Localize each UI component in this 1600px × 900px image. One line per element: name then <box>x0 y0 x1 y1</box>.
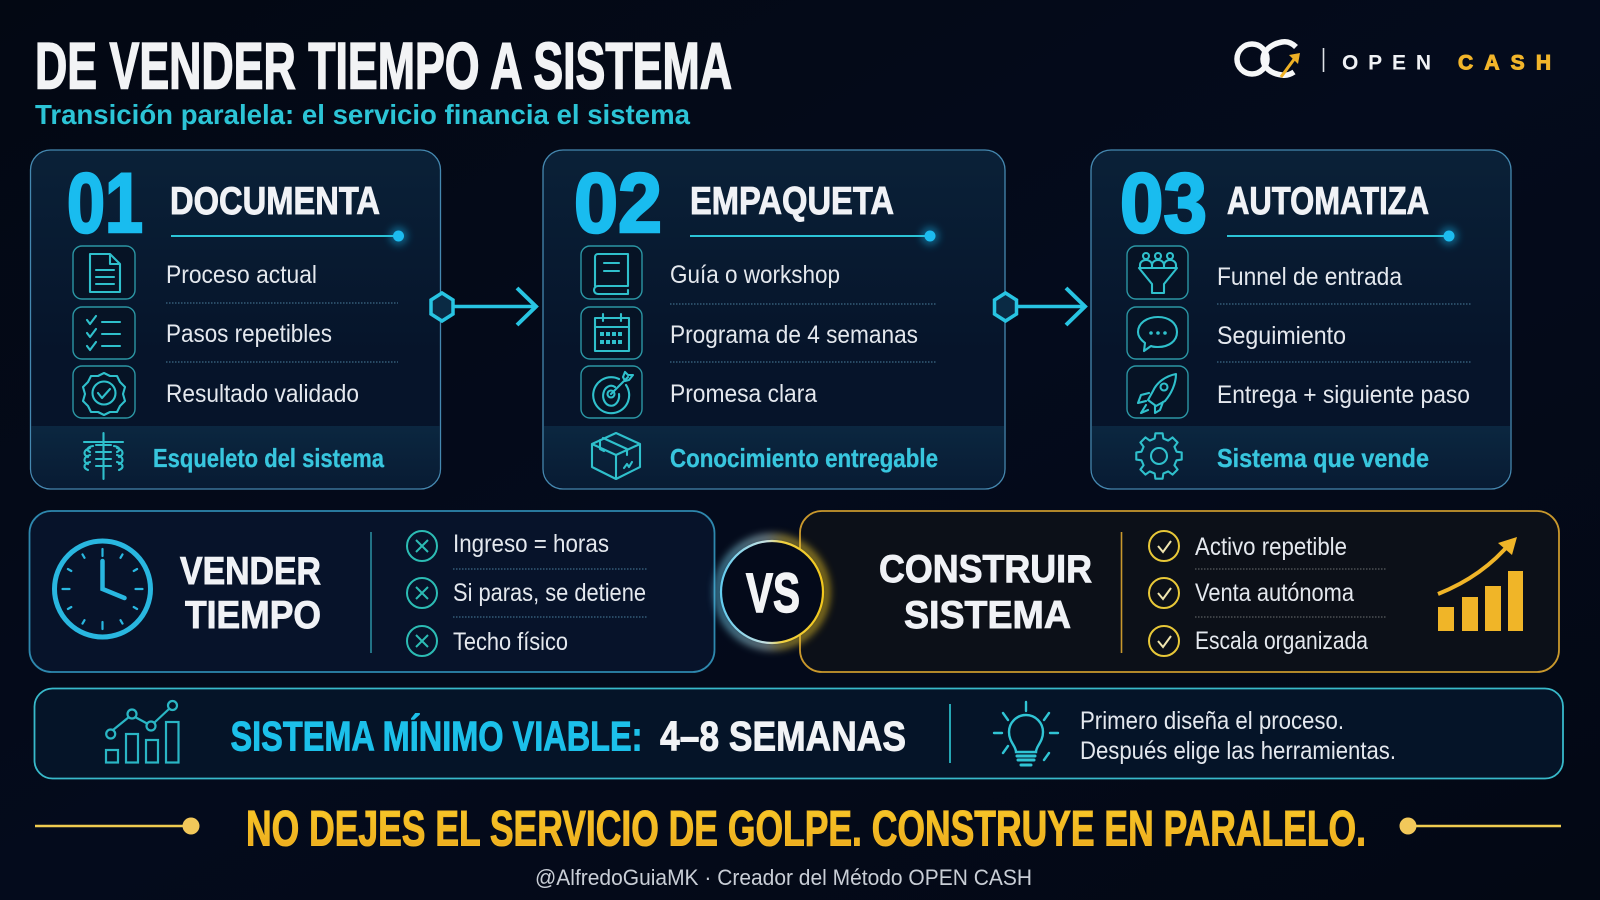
panel: construir sistema <box>800 511 1559 672</box>
heading rule <box>171 227 408 245</box>
heading: DOCUMENTA <box>170 180 380 223</box>
panel: vender tiempo <box>30 511 714 672</box>
item: Venta autónoma <box>1195 579 1354 607</box>
panel: sistema minimo viable <box>34 688 1563 778</box>
arrow 1 <box>431 288 536 325</box>
panel: 03 automatiza <box>1091 150 1511 489</box>
value: 4–8 SEMANAS <box>660 712 906 760</box>
item: Programa de 4 semanas <box>670 321 918 349</box>
icon: clock <box>54 541 150 637</box>
item: Pasos repetibles <box>166 320 332 348</box>
icon: target <box>581 366 642 418</box>
icon: light bulb <box>994 702 1058 765</box>
icon: chart <box>106 701 178 762</box>
footer label: Sistema que vende <box>1217 443 1429 473</box>
item: Techo físico <box>453 628 568 656</box>
icon: cross 1 <box>407 531 437 561</box>
heading: AUTOMATIZA <box>1227 180 1429 223</box>
item: Ingreso = horas <box>453 530 609 558</box>
footer label: Conocimiento entregable <box>670 443 938 473</box>
label: SISTEMA MÍNIMO VIABLE: <box>230 712 642 760</box>
heading rule <box>690 227 939 245</box>
icon: gear <box>1136 433 1182 479</box>
icon: rocket <box>1127 366 1188 418</box>
note: Después elige las herramientas. <box>1080 737 1396 765</box>
icon: document <box>73 246 135 299</box>
footer band <box>544 426 1004 488</box>
footer label: Esqueleto del sistema <box>153 443 384 473</box>
number: 01 <box>67 156 143 250</box>
icon: book <box>581 246 642 299</box>
heading: SISTEMA <box>904 594 1071 637</box>
item: Promesa clara <box>670 380 817 408</box>
note: Primero diseña el proceso. <box>1080 707 1344 735</box>
icon: check 2 <box>1149 578 1179 608</box>
VS badge <box>718 538 826 646</box>
icon: package <box>592 433 640 479</box>
item: Seguimiento <box>1217 322 1346 350</box>
footer band <box>32 426 440 488</box>
left connector <box>35 818 200 834</box>
item: Funnel de entrada <box>1217 263 1402 291</box>
icon: funnel <box>1127 246 1188 299</box>
VS text: VS <box>746 561 800 624</box>
right connector <box>1400 818 1561 834</box>
heading: EMPAQUETA <box>690 180 894 223</box>
icon: checklist <box>73 307 135 359</box>
icon: cross 3 <box>407 626 437 656</box>
heading: CONSTRUIR <box>879 548 1092 591</box>
arrow 2 <box>994 288 1085 325</box>
number: 03 <box>1120 156 1207 250</box>
logo word OPEN: OPEN <box>1342 52 1431 74</box>
item: Guía o workshop <box>670 261 840 289</box>
icon: growth bars <box>1438 537 1523 631</box>
logo: Open Cash <box>1237 42 1551 77</box>
number: 02 <box>574 156 662 250</box>
item: Entrega + siguiente paso <box>1217 381 1470 409</box>
logo word CASH: CASH <box>1458 52 1551 74</box>
icon: skeleton <box>84 433 123 479</box>
icon: check 3 <box>1149 626 1179 656</box>
item: Resultado validado <box>166 380 359 408</box>
icon: calendar <box>581 307 642 359</box>
footer band <box>1092 426 1510 488</box>
icon: check 1 <box>1149 531 1179 561</box>
panel: 02 empaqueta <box>543 150 1005 489</box>
heading rule <box>1227 227 1458 245</box>
item: Proceso actual <box>166 261 317 289</box>
item: Si paras, se detiene <box>453 579 646 607</box>
icon: cross 2 <box>407 578 437 608</box>
item: Escala organizada <box>1195 627 1368 655</box>
icon: chat <box>1127 307 1188 359</box>
heading: TIEMPO <box>185 594 321 637</box>
icon: OC mark <box>1237 42 1300 77</box>
subtitle: Transición paralela: el servicio financia el sistema <box>35 99 690 130</box>
title: DE VENDER TIEMPO A SISTEMA <box>35 28 732 102</box>
item: Activo repetible <box>1195 533 1347 561</box>
panel: 01 documenta <box>30 150 440 489</box>
credit: @AlfredoGuiaMK · Creador del Método OPEN CASH <box>535 865 1032 890</box>
heading: VENDER <box>180 550 321 593</box>
icon: validated seal <box>73 366 135 418</box>
logo divider <box>1322 48 1324 72</box>
